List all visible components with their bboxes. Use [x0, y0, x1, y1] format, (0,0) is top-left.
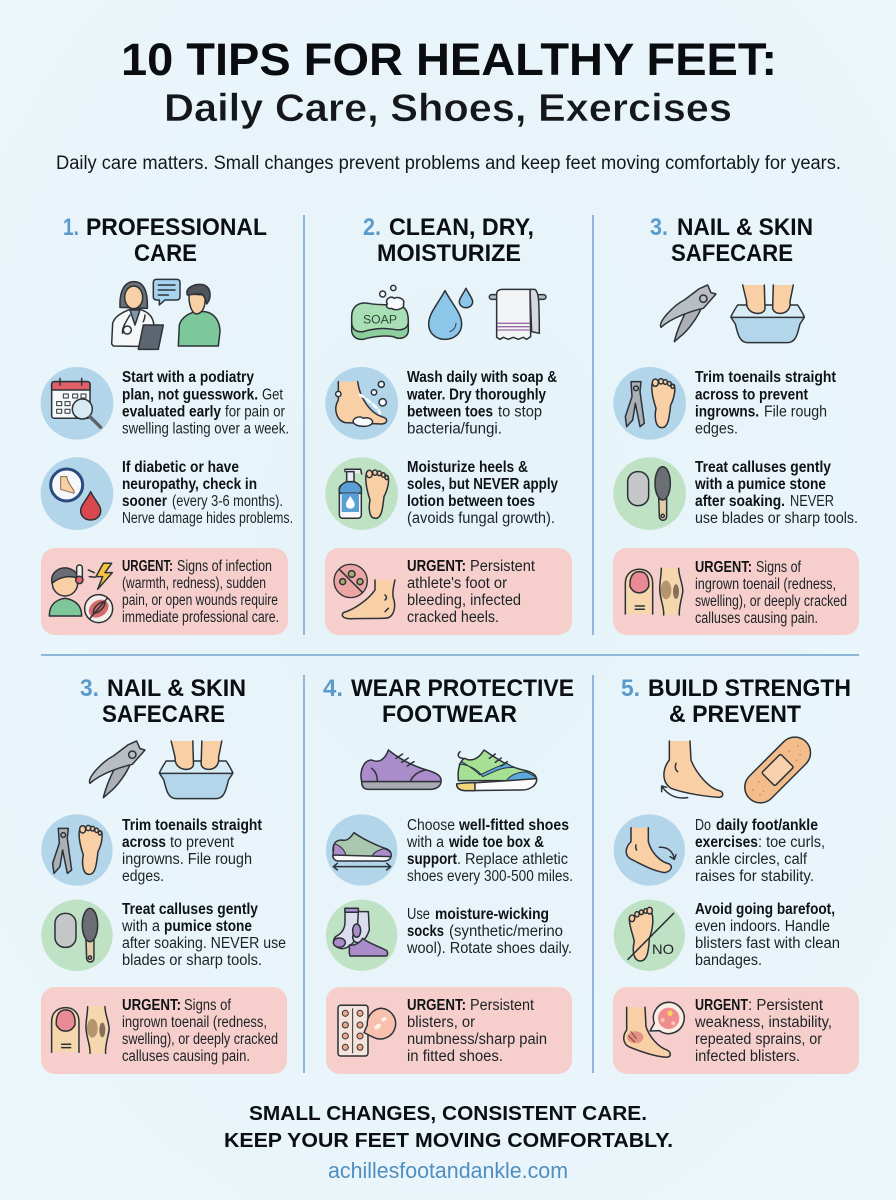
- tip 2: text: [407, 459, 558, 527]
- tip 1: text: across: [122, 834, 166, 851]
- tip 1: text: [406, 817, 573, 885]
- tip 1: text: exercises: [695, 834, 758, 851]
- icon: soap: [352, 285, 408, 339]
- tip 2: text: soles, but NEVER apply: [407, 476, 558, 493]
- tip 1: text: ingrowns. File rough: [122, 851, 252, 868]
- urgent text: : Persistent: [748, 997, 824, 1014]
- tip 2: text: with a: [121, 918, 160, 935]
- tip 1: text: support: [407, 851, 457, 868]
- heading: [323, 675, 574, 728]
- tip 2: text: blades or sharp tools.: [122, 952, 262, 969]
- urgent box: [325, 548, 572, 635]
- urgent text: URGENT:: [407, 558, 466, 575]
- icon: doctor and patient: [112, 279, 220, 349]
- icon: ingrown toenail and cracked callus: [625, 568, 683, 615]
- tip 2: text: (avoids fungal growth).: [407, 510, 555, 527]
- tip 2: lotion icon: [325, 457, 398, 530]
- heading: FOOTWEAR: [382, 701, 517, 728]
- tip 1: text: [122, 817, 262, 885]
- urgent text: Signs of: [756, 559, 802, 576]
- tip 2: text: wool). Rotate shoes daily.: [406, 940, 572, 957]
- tip 2: text: after soaking. NEVER use: [122, 935, 286, 952]
- tip 1: text: bacteria/fungi.: [407, 420, 502, 438]
- tip 1: text: to stop: [498, 404, 542, 420]
- urgent text: weakness, instability,: [694, 1014, 832, 1031]
- urgent text: calluses causing pain.: [695, 610, 818, 627]
- heading: [650, 214, 813, 267]
- urgent text: immediate professional care.: [122, 609, 279, 626]
- heading: [621, 675, 851, 728]
- tip 2: text: with a pumice stone: [694, 476, 826, 493]
- tip 1: text: swelling lasting over a week.: [122, 420, 289, 438]
- urgent text: pain, or open wounds require: [122, 592, 278, 609]
- panel: 2 clean dry moisturize: [325, 214, 572, 635]
- tip 1: text: ankle circles, calf: [695, 851, 808, 868]
- panel: 3 nail and skin safecare: [613, 214, 859, 635]
- tip 1: text: [406, 369, 557, 438]
- urgent text: URGENT:: [122, 558, 173, 575]
- urgent text: swelling), or deeply cracked: [122, 1031, 278, 1048]
- tip 1: text: Wash daily with soap &: [407, 369, 557, 386]
- title: 10 TIPS FOR HEALTHY FEET:: [121, 34, 777, 85]
- tip 2: no barefoot icon: NO: [652, 941, 674, 957]
- tip 2: text: Treat calluses gently: [695, 459, 831, 476]
- icon: ingrown toenail and cracked callus: [52, 1007, 109, 1053]
- icon: nail clipper: [661, 285, 716, 342]
- tip 1: clipper and foot icon: [613, 367, 686, 440]
- heading: 2.: [363, 214, 381, 241]
- urgent text: [694, 997, 832, 1065]
- urgent box: [613, 548, 859, 635]
- urgent box: [326, 987, 572, 1074]
- panel: 5 build strength and prevent: [613, 675, 859, 1074]
- urgent text: URGENT: [695, 997, 748, 1014]
- tip 1: text: edges.: [122, 868, 164, 885]
- footer message: [224, 1102, 673, 1152]
- tip 2: text: after soaking.: [695, 493, 785, 510]
- tip 2: text: lotion between toes: [407, 493, 535, 510]
- tip 2: text: (every 3-6 months).: [172, 493, 283, 510]
- tip 1: text: Trim toenails straight: [695, 369, 836, 386]
- heading: 1.: [63, 214, 79, 241]
- urgent text: bleeding, infected: [407, 592, 521, 609]
- urgent text: [407, 558, 536, 626]
- panel: 3 nail and skin safecare, repeated: [41, 675, 287, 1074]
- tip 2: text: sooner: [122, 493, 167, 510]
- tip 2: text: If diabetic or have: [122, 459, 239, 476]
- icon: purple shoe: [361, 750, 441, 789]
- icon: towel on rack: [489, 289, 546, 339]
- icon: bandage pack and blister: [338, 1005, 396, 1056]
- tip 1: text: [122, 369, 289, 438]
- tip 2: text: NEVER: [790, 493, 834, 510]
- urgent text: ingrown toenail (redness,: [122, 1014, 267, 1031]
- tip 1: text: raises for stability.: [695, 868, 814, 885]
- tip 2: text: [122, 459, 293, 527]
- tip 2: text: [694, 459, 858, 527]
- heading: NAIL & SKIN: [677, 214, 813, 241]
- icon: feet soaking in basin: [731, 285, 804, 343]
- urgent text: URGENT:: [695, 559, 752, 576]
- icon: fever and wound: [49, 563, 113, 623]
- tip 1: text: daily foot/ankle: [716, 817, 818, 834]
- tip 2: text: blisters fast with clean: [695, 935, 840, 952]
- tip 2: text: Nerve damage hides problems.: [122, 510, 293, 527]
- tip 2: text: bandages.: [695, 952, 762, 969]
- footer message: KEEP YOUR FEET MOVING COMFORTABLY.: [224, 1129, 673, 1152]
- tip 1: text: . Replace athletic: [457, 851, 568, 868]
- tip 1: text: plan, not guesswork.: [122, 386, 258, 404]
- heading: 4.: [323, 675, 343, 702]
- tip 1: wide shoe icon: [326, 814, 397, 886]
- tip 2: text: [695, 901, 840, 969]
- tip 2: text: even indoors. Handle: [695, 918, 830, 935]
- urgent text: URGENT:: [122, 997, 181, 1014]
- urgent text: [122, 558, 279, 626]
- tip 2: foot and blood drop icon: [41, 457, 113, 530]
- tip 1: text: well-fitted shoes: [458, 817, 569, 834]
- icon: water drops: [429, 288, 473, 339]
- tip 1: text: evaluated early: [122, 404, 221, 420]
- urgent text: [695, 559, 847, 627]
- tip 1: text: [695, 817, 825, 885]
- urgent text: ingrown toenail (redness,: [695, 576, 836, 593]
- urgent text: numbness/sharp pain: [407, 1031, 547, 1048]
- tip 1: text: to prevent: [170, 834, 235, 851]
- urgent text: Signs of infection: [177, 558, 272, 575]
- tip 1: text: water. Dry thoroughly: [406, 386, 546, 404]
- title: [121, 34, 777, 130]
- urgent text: calluses causing pain.: [122, 1048, 250, 1065]
- title: Daily Care, Shoes, Exercises: [164, 87, 732, 130]
- urgent text: URGENT:: [407, 997, 466, 1014]
- tip 1: text: Trim toenails straight: [122, 817, 262, 834]
- urgent text: blisters, or: [407, 1014, 475, 1031]
- urgent text: athlete's foot or: [407, 575, 507, 592]
- heading: MOISTURIZE: [377, 240, 521, 267]
- tip 1: clipper and foot icon: [41, 814, 113, 886]
- intro text: Daily care matters. Small changes prevent problems and keep feet moving comfortably for years.: [56, 153, 841, 174]
- footer message: SMALL CHANGES, CONSISTENT CARE.: [249, 1102, 647, 1125]
- heading: 5.: [621, 675, 640, 702]
- tip 1: wash foot icon: [325, 367, 398, 440]
- panel: 1 professional care: [41, 214, 293, 635]
- tip 2: text: Moisturize heels &: [407, 459, 528, 476]
- urgent text: [407, 997, 547, 1065]
- tip 2: text: [121, 901, 286, 969]
- tip 2: text: neuropathy, check in: [122, 476, 257, 493]
- tip 1: text: File rough: [764, 404, 827, 420]
- icon: soap: SOAP: [363, 312, 397, 326]
- urgent text: repeated sprains, or: [695, 1031, 822, 1048]
- urgent text: in fitted shoes.: [407, 1048, 503, 1065]
- tip 1: text: wide toe box &: [448, 834, 544, 851]
- tip 2: socks and shoe icon: [326, 900, 397, 971]
- heading: & PREVENT: [669, 701, 801, 728]
- icon: bandage: [738, 731, 817, 809]
- heading: PROFESSIONAL: [86, 214, 267, 241]
- tip 1: foot flex icon: [614, 814, 685, 886]
- tip 2: text: Treat calluses gently: [122, 901, 258, 918]
- tip 2: text: (synthetic/merino: [449, 923, 563, 940]
- tip 2: pumice stone icon: [41, 900, 113, 971]
- urgent text: Persistent: [470, 558, 536, 575]
- heading: CLEAN, DRY,: [389, 214, 534, 241]
- heading: [80, 675, 246, 728]
- urgent box: [41, 548, 288, 635]
- urgent text: Signs of: [184, 997, 232, 1014]
- tip 2: text: socks: [407, 923, 444, 940]
- urgent text: cracked heels.: [407, 609, 499, 626]
- urgent text: infected blisters.: [695, 1048, 800, 1065]
- icon: nail clipper: [90, 741, 145, 798]
- tip 1: text: [695, 369, 836, 438]
- tip 1: text: with a: [406, 834, 444, 851]
- heading: BUILD STRENGTH: [648, 675, 851, 702]
- urgent text: [122, 997, 278, 1065]
- tip 1: text: between toes: [407, 404, 493, 420]
- tip 1: text: Do: [695, 817, 711, 834]
- heading: SAFECARE: [102, 701, 225, 728]
- tip 2: text: moisture-wicking: [435, 906, 549, 923]
- heading: [63, 214, 267, 267]
- heading: SAFECARE: [671, 240, 793, 267]
- icon: sprained foot and infected blister: [624, 1002, 684, 1057]
- website url: achillesfootandankle.com: [328, 1158, 568, 1183]
- tip 1: calendar icon: [41, 367, 113, 440]
- tip 2: no barefoot icon: [614, 900, 685, 971]
- heading: NAIL & SKIN: [107, 675, 246, 702]
- tip 1: text: across to prevent: [695, 386, 808, 404]
- heading: [363, 214, 534, 267]
- heading: CARE: [134, 240, 197, 267]
- tip 1: text: Choose: [407, 817, 455, 834]
- tip 1: text: Start with a podiatry: [122, 369, 254, 386]
- tip 1: text: edges.: [695, 420, 738, 438]
- icon: green running shoe: [457, 750, 537, 791]
- tip 2: text: Avoid going barefoot,: [695, 901, 835, 918]
- tip 1: text: ingrowns.: [695, 404, 759, 420]
- tip 1: text: : toe curls,: [758, 834, 825, 851]
- icon: foot with rotation arrow: [662, 741, 723, 798]
- heading: WEAR PROTECTIVE: [351, 675, 574, 702]
- tip 2: pumice stone icon: [613, 457, 686, 530]
- heading: 3.: [650, 214, 668, 241]
- urgent text: (warmth, redness), sudden: [122, 575, 266, 592]
- tip 1: text: Get: [262, 386, 284, 404]
- icon: feet soaking in basin: [159, 741, 233, 799]
- icon: fungus prohibited and foot: [334, 564, 395, 619]
- tip 2: text: [406, 906, 572, 957]
- tip 1: text: shoes every 300-500 miles.: [407, 868, 573, 885]
- tip 2: text: use blades or sharp tools.: [695, 510, 858, 527]
- tip 1: text: for pain or: [225, 404, 285, 420]
- tip 2: text: Use: [407, 906, 430, 923]
- urgent box: [41, 987, 287, 1074]
- urgent text: swelling), or deeply cracked: [695, 593, 847, 610]
- urgent box: [613, 987, 859, 1074]
- urgent text: Persistent: [470, 997, 535, 1014]
- panel: 4 wear protective footwear: [323, 675, 574, 1074]
- heading: 3.: [80, 675, 99, 702]
- tip 2: text: pumice stone: [164, 918, 252, 935]
